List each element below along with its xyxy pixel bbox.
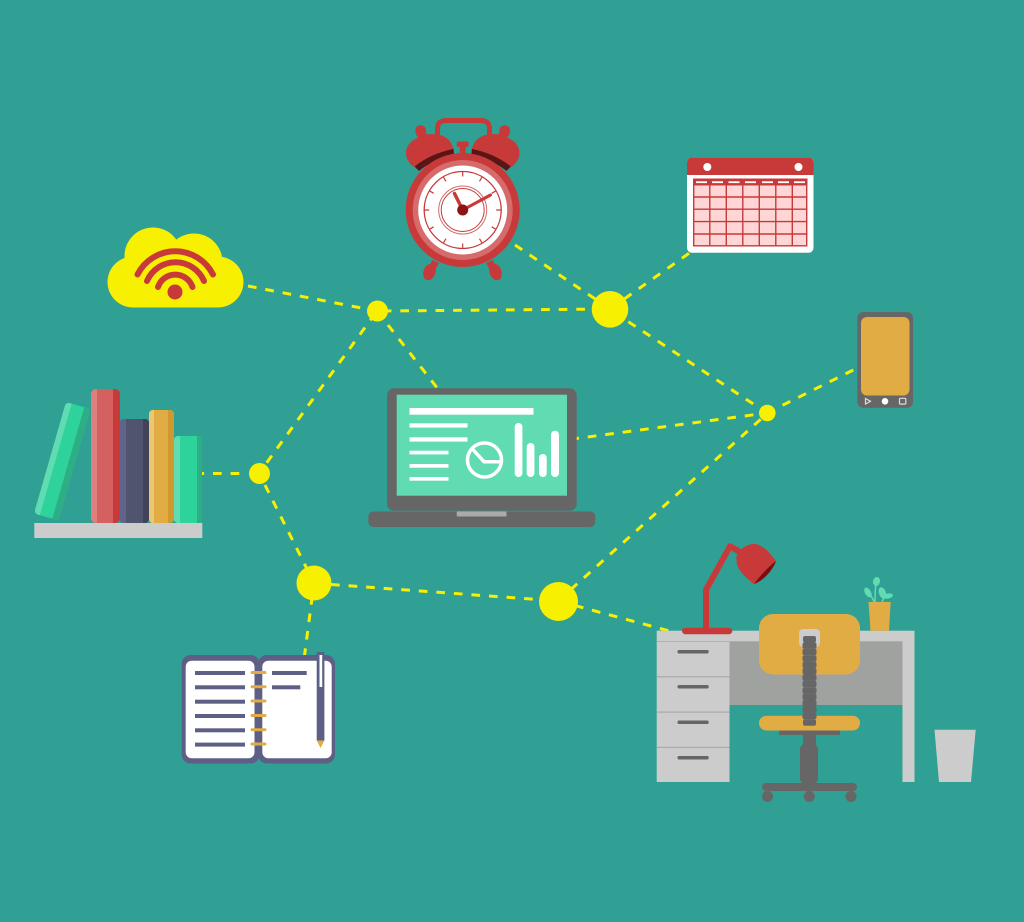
dashed network connections — [197, 245, 853, 657]
icon: waste bin — [934, 730, 976, 782]
bar chart — [515, 423, 559, 477]
icon: spiral notebook and pen — [182, 652, 335, 764]
icon: wifi cloud — [108, 228, 244, 308]
icon: desk lamp — [682, 544, 776, 634]
icon: laptop — [368, 388, 595, 527]
icon: smartphone — [857, 312, 913, 408]
icon: alarm clock — [406, 120, 520, 282]
icon: office chair — [759, 614, 860, 802]
network nodes — [249, 291, 776, 621]
icon: calendar — [687, 157, 814, 253]
icon: office desk — [657, 631, 914, 782]
pie chart — [468, 443, 502, 477]
icon: books on shelf — [34, 389, 202, 538]
icon: potted plant — [863, 576, 893, 631]
